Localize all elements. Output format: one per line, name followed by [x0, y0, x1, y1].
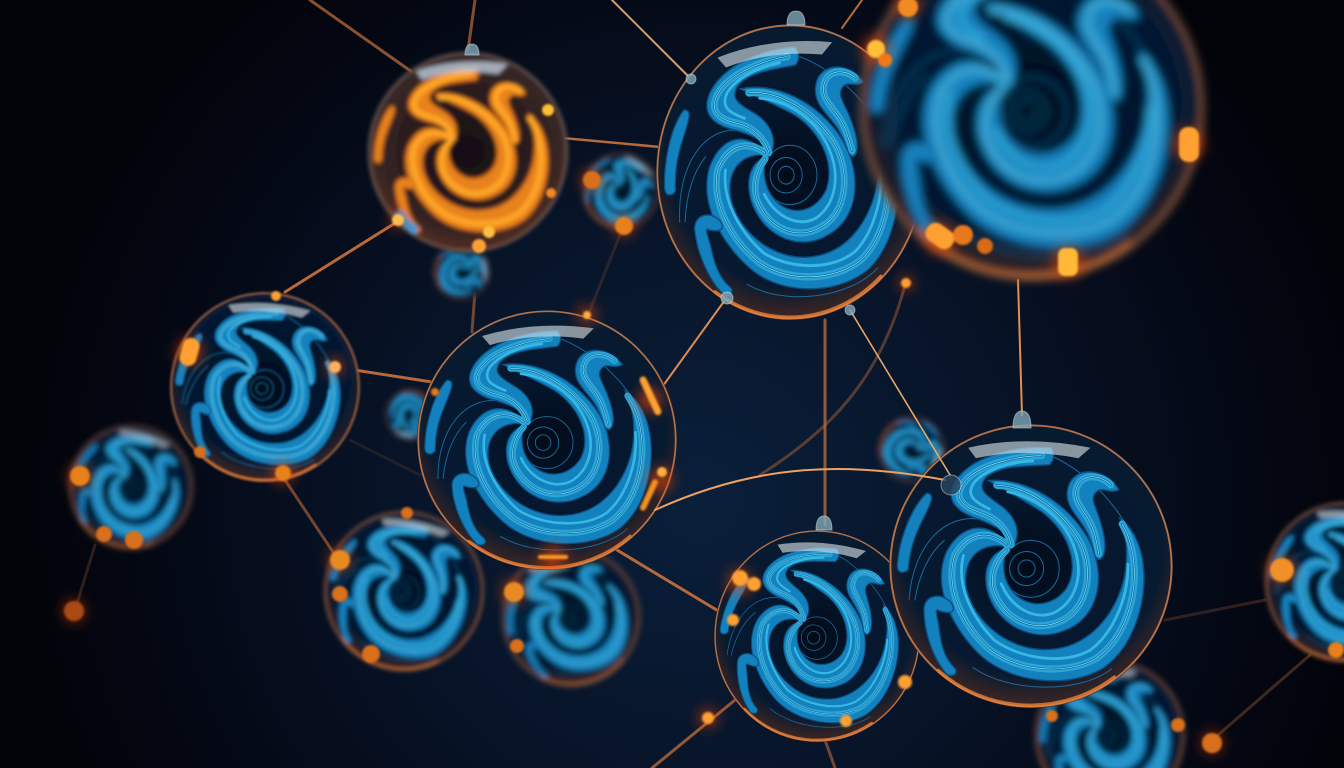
- sphere: small blue behind right sphere: [867, 405, 957, 495]
- sphere: far right edge: [1252, 489, 1344, 675]
- sphere: bottom right: [1035, 660, 1185, 768]
- sphere: large blue right: [879, 414, 1183, 718]
- sphere: small blue under orange: [434, 244, 490, 300]
- sphere: bottom centre: [701, 516, 933, 756]
- foreground filaments: [655, 310, 950, 510]
- sphere: small blue top centre: [567, 137, 675, 245]
- glass beads at filament joints: [465, 11, 1031, 530]
- sphere: huge blue top right: [846, 0, 1218, 294]
- sphere: small blue left of centre: [378, 383, 442, 447]
- sphere: far left: [52, 408, 210, 566]
- background spheres (defocused): [52, 137, 1344, 768]
- sphere: blue left: [158, 280, 372, 494]
- sphere: lower centre: [491, 537, 651, 697]
- sphere: large blue top: [649, 16, 931, 328]
- sphere: lower left: [306, 493, 502, 689]
- sphere: orange swirl: [368, 52, 568, 252]
- sphere: central blue: [417, 310, 677, 570]
